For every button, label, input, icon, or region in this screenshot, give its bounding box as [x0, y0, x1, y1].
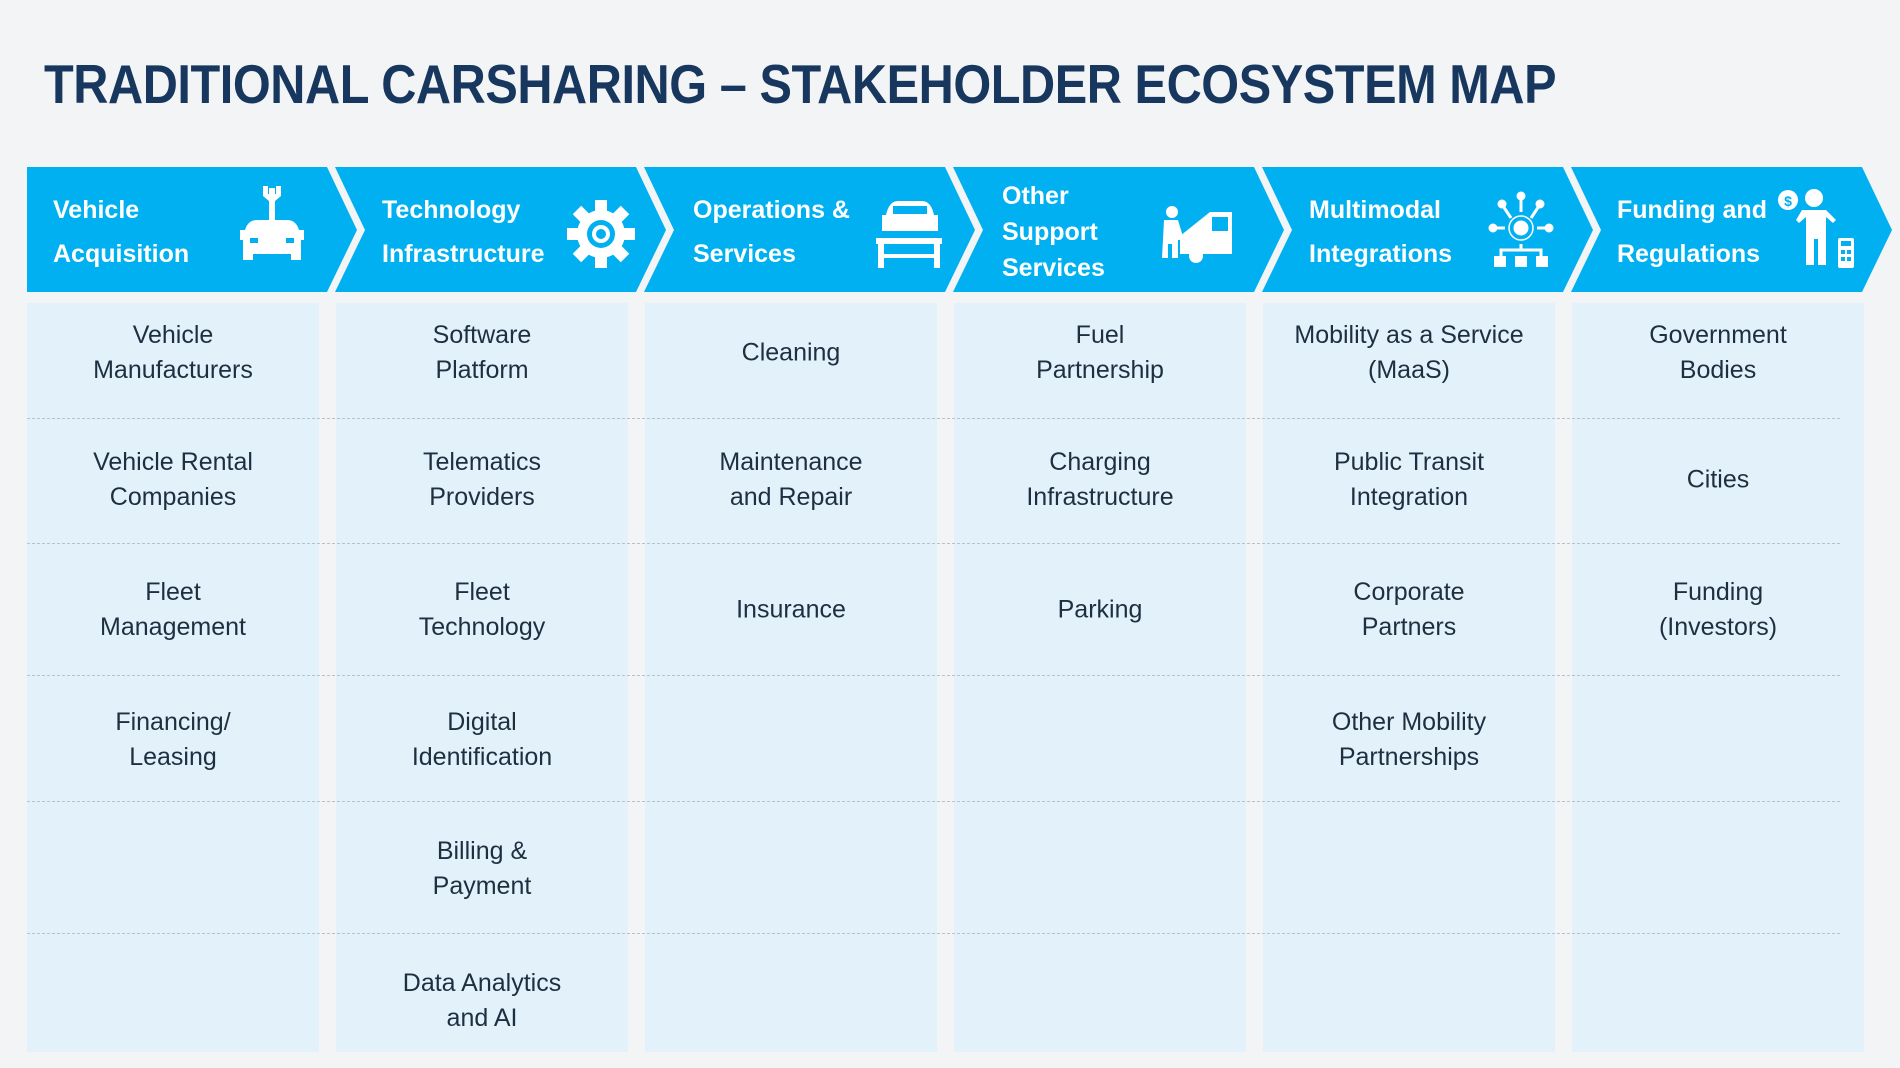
column 2 cells: Payment	[433, 872, 531, 900]
column 1 cells: Fleet	[145, 578, 201, 606]
text: Operations &	[693, 196, 850, 224]
column 5 cells: Partnerships	[1339, 743, 1479, 771]
column 3 cells: and Repair	[730, 483, 852, 511]
icon: car on lift	[876, 201, 942, 268]
column 2 cells: Providers	[429, 483, 535, 511]
text: Funding and	[1617, 196, 1767, 224]
text: Multimodal	[1309, 196, 1441, 224]
text: Other	[1002, 182, 1069, 210]
column 2 cells	[403, 321, 561, 1032]
column 6 cells: (Investors)	[1659, 613, 1777, 641]
column 6 cells	[1649, 321, 1787, 641]
title: TRADITIONAL CARSHARING – STAKEHOLDER ECOSYSTEM MAP	[44, 53, 1556, 115]
header texts	[53, 196, 189, 268]
icon: network	[1490, 193, 1552, 267]
text: Services	[1002, 254, 1105, 282]
icon: car with wrench	[240, 186, 304, 260]
column 5 cells: Partners	[1362, 613, 1456, 641]
column 1 cells: Financing/	[115, 708, 231, 736]
icon: person with money and calculator	[1778, 189, 1854, 268]
icon: gear	[567, 200, 635, 268]
column 2 cells: Fleet	[454, 578, 510, 606]
text: Integrations	[1309, 240, 1452, 268]
column 5 cells	[1294, 321, 1524, 771]
column 2 cells: Telematics	[423, 448, 541, 476]
text: Services	[693, 240, 796, 268]
column 2 cells: Platform	[435, 356, 529, 384]
column 2 cells: Software	[433, 321, 531, 349]
column 3 cells: Maintenance	[719, 448, 863, 476]
header texts: Acquisition	[53, 240, 189, 268]
column 1 cells: Manufacturers	[93, 356, 253, 384]
header texts: Vehicle	[53, 196, 139, 224]
text: Technology	[382, 196, 520, 224]
column 2 cells: Billing &	[437, 837, 527, 865]
column 5 cells: Mobility as a Service	[1294, 321, 1524, 349]
column 2 cells: Data Analytics	[403, 969, 561, 997]
column 5 cells: Other Mobility	[1332, 708, 1486, 736]
column 1 cells: Vehicle Rental	[93, 448, 253, 476]
column 5 cells: Integration	[1350, 483, 1468, 511]
column 6 cells: Funding	[1673, 578, 1763, 606]
column 4 cells: Partnership	[1036, 356, 1164, 384]
column 3 cells: Cleaning	[742, 338, 840, 366]
column 5 cells: Public Transit	[1334, 448, 1484, 476]
column 1 cells: Leasing	[129, 743, 217, 771]
column 4 cells: Parking	[1058, 596, 1142, 624]
column 1 cells: Vehicle	[133, 321, 213, 349]
column 3 cells: Insurance	[736, 596, 846, 624]
column 2 cells: Digital	[447, 708, 517, 736]
column 3 cells	[719, 338, 863, 624]
column 5 cells: Corporate	[1353, 578, 1465, 606]
icon: fuel service	[1162, 206, 1232, 263]
column 4 cells: Infrastructure	[1026, 483, 1174, 511]
column 5 cells: (MaaS)	[1368, 356, 1450, 384]
column 6 cells: Cities	[1687, 466, 1749, 494]
text: Regulations	[1617, 240, 1760, 268]
column 1 cells: Companies	[110, 483, 236, 511]
column 6 cells: Bodies	[1680, 356, 1756, 384]
column 2 cells: Technology	[419, 613, 545, 641]
header chevrons	[27, 167, 1892, 292]
column 4 cells	[1026, 321, 1174, 624]
text: Infrastructure	[382, 240, 545, 268]
column 4 cells: Fuel	[1076, 321, 1124, 349]
column 2 cells: Identification	[412, 743, 552, 771]
column 1 cells	[93, 321, 253, 771]
column 1 cells: Management	[100, 613, 246, 641]
column 4 cells: Charging	[1049, 448, 1151, 476]
column 6 cells: Government	[1649, 321, 1787, 349]
icon: person with money and calculator: $	[1784, 193, 1792, 209]
text: Support	[1002, 218, 1098, 246]
column 2 cells: and AI	[447, 1004, 517, 1032]
